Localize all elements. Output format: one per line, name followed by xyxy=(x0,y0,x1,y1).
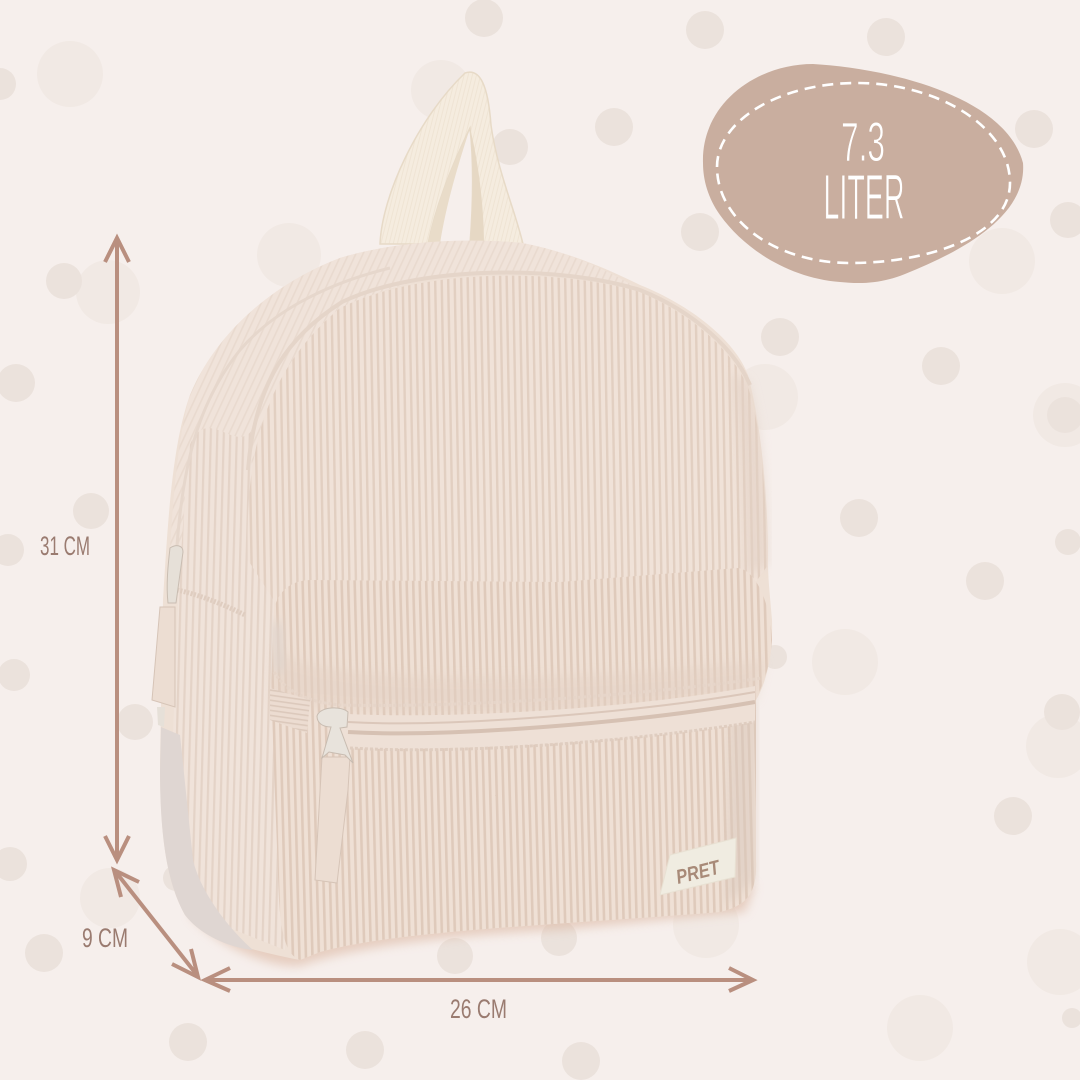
backpack body silhouette xyxy=(160,241,772,960)
arrow: depth xyxy=(114,870,198,977)
arrow: width xyxy=(205,968,753,991)
front pocket xyxy=(270,568,772,960)
zipper band xyxy=(318,686,755,749)
side pocket seam xyxy=(177,590,245,615)
pocket left crease xyxy=(272,620,285,675)
zipper along top xyxy=(176,268,390,560)
capacity badge xyxy=(703,64,1023,283)
icon: front zipper pull xyxy=(315,708,353,883)
label: width: 26 CM xyxy=(450,994,507,1024)
gusset top band xyxy=(170,241,640,600)
pocket lower right shade xyxy=(725,700,756,905)
front panel upper corduroy xyxy=(248,276,768,610)
icon: backpack handle xyxy=(380,72,523,244)
dashed stitch outline xyxy=(717,83,1010,263)
right edge shade xyxy=(730,375,768,575)
capacity value: 7.3 xyxy=(841,110,885,173)
brand label xyxy=(660,838,736,895)
icon: side zipper pull xyxy=(152,546,183,727)
stitched seam xyxy=(248,273,750,470)
backpack illustration xyxy=(152,72,772,966)
capacity badge: LITER xyxy=(824,161,904,233)
brand label: PRET xyxy=(674,857,723,889)
label: height: 31 CM xyxy=(40,531,90,561)
label: depth: 9 CM xyxy=(82,923,128,953)
side corduroy panel xyxy=(172,428,285,950)
grey lower side xyxy=(160,727,253,950)
arrow: height xyxy=(105,238,129,860)
pocket shading xyxy=(272,650,765,713)
zipper end tab xyxy=(270,688,310,733)
shadow xyxy=(190,880,755,966)
